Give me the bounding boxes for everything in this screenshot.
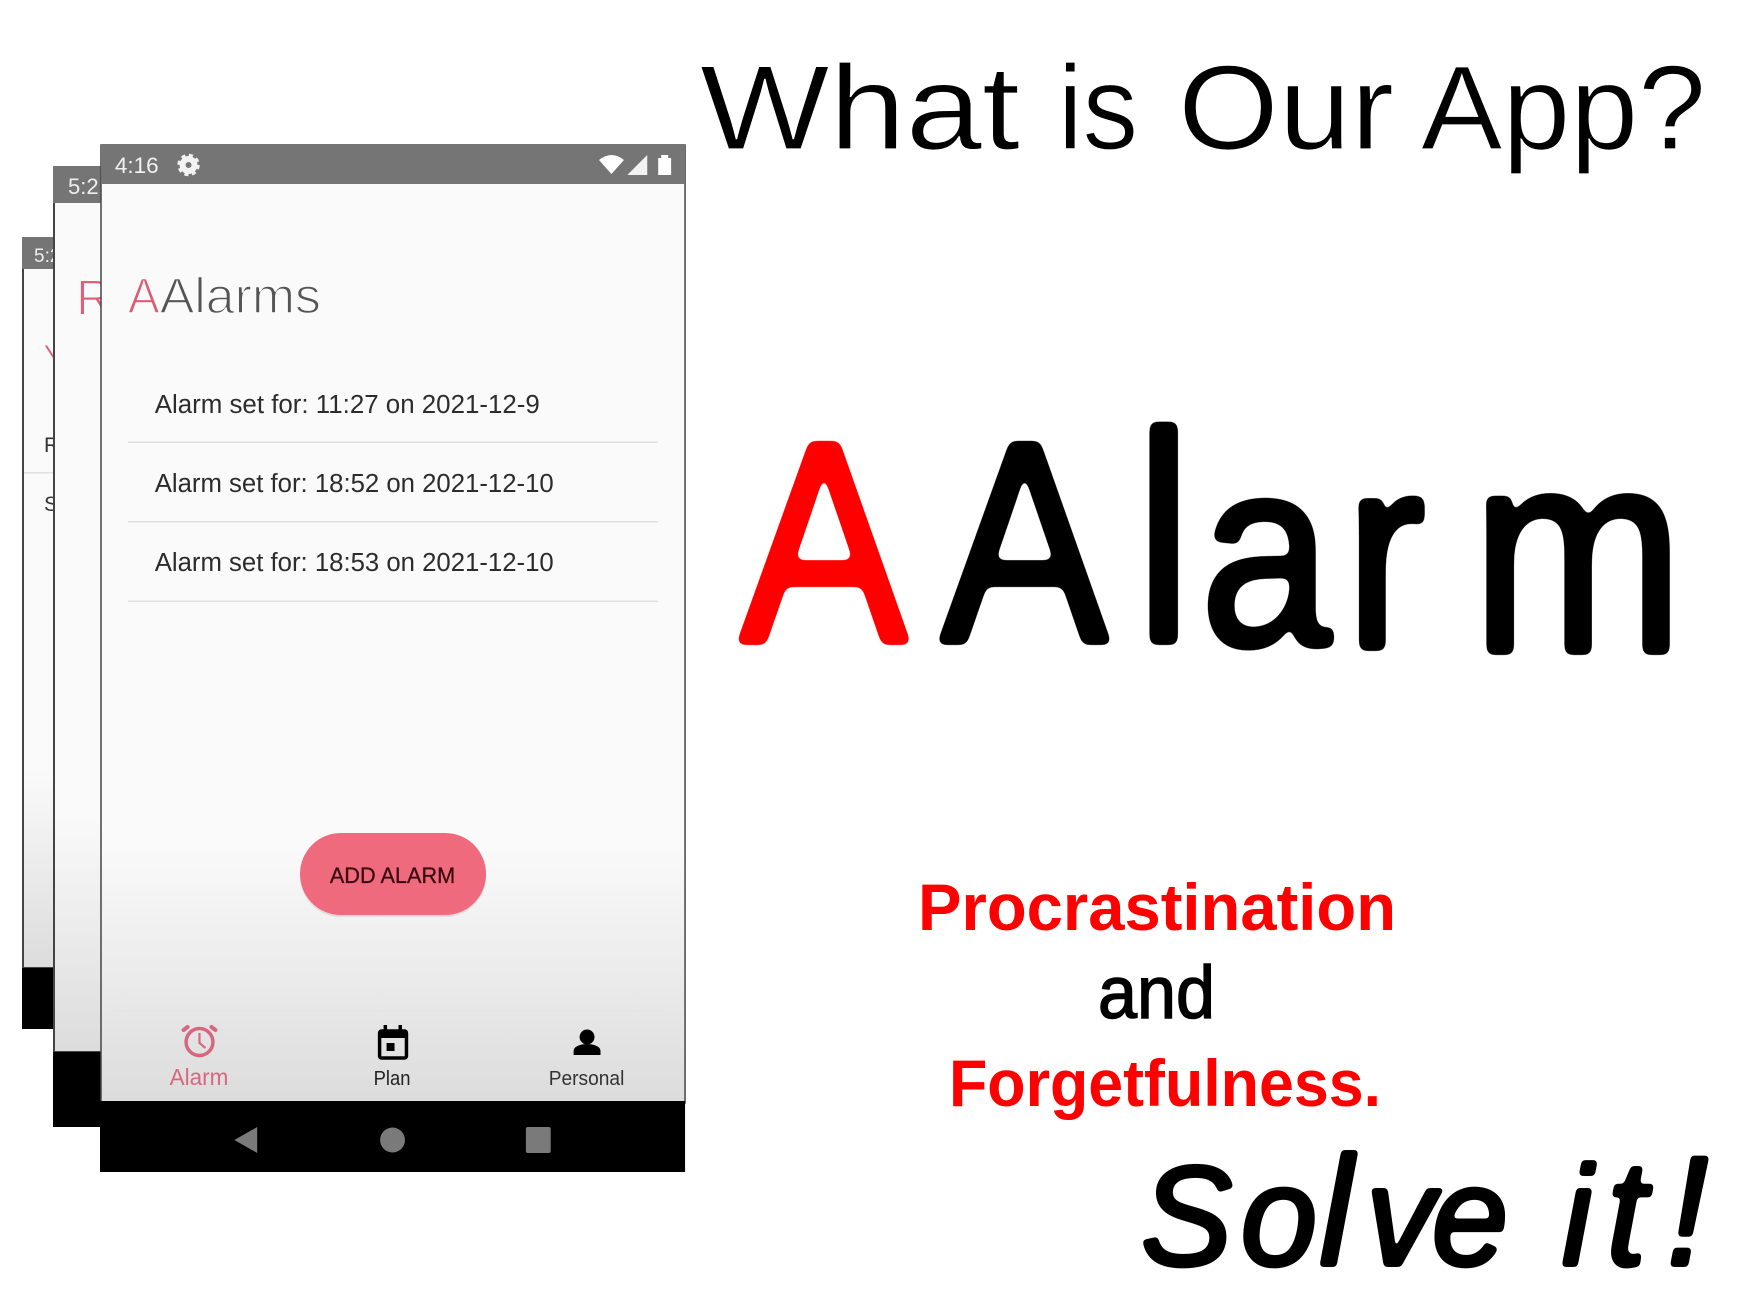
solve it slogan: t xyxy=(1606,1130,1653,1293)
app name logo: A xyxy=(940,382,1110,704)
add alarm button: ADD ALARM xyxy=(330,863,455,888)
back phone screenshot xyxy=(22,237,83,1029)
middle phone screenshot: R xyxy=(76,270,112,326)
alarm list: Alarm set for: 18:52 on 2021-12-10 xyxy=(155,470,554,498)
problem statement: Forgetfulness. xyxy=(949,1046,1381,1120)
icon: signal xyxy=(627,155,647,175)
title: is xyxy=(1058,41,1138,175)
main phone screenshot xyxy=(100,144,685,1172)
app name logo: r xyxy=(1345,397,1426,707)
status bar: 4:16 xyxy=(115,153,159,178)
solve it slogan: i xyxy=(1562,1136,1596,1293)
back phone screenshot: Y xyxy=(43,337,67,378)
problem statement xyxy=(918,870,1396,1120)
solve it slogan: S xyxy=(1141,1136,1233,1293)
back phone screenshot: S xyxy=(44,493,58,516)
problem statement: and xyxy=(1098,951,1215,1034)
nav: plan tab: Plan xyxy=(374,1068,410,1090)
title: App? xyxy=(1421,41,1706,175)
alarm list xyxy=(128,391,658,602)
title: Our xyxy=(1178,41,1394,175)
app screen background xyxy=(101,145,685,1103)
back phone screenshot: 5:2 xyxy=(34,246,60,267)
middle phone screenshot xyxy=(53,166,114,1127)
alarm list: Alarm set for: 11:27 on 2021-12-9 xyxy=(155,391,540,419)
app title: A xyxy=(128,268,160,324)
nav: personal tab: Personal xyxy=(549,1068,624,1090)
solve it slogan: o xyxy=(1241,1136,1317,1293)
title: What xyxy=(700,41,1020,175)
back phone screenshot: R xyxy=(44,434,59,457)
solve it slogan: v xyxy=(1366,1136,1442,1293)
app name logo: m xyxy=(1471,390,1684,714)
main phone screenshot: Alarms xyxy=(160,268,321,324)
app name logo: a xyxy=(1200,403,1332,702)
nav: alarm tab xyxy=(170,1027,228,1090)
nav: plan tab xyxy=(374,1025,410,1090)
alarm list: Alarm set for: 18:53 on 2021-12-10 xyxy=(155,549,554,577)
nav: alarm tab: Alarm xyxy=(170,1064,228,1090)
solve it slogan xyxy=(1141,1124,1709,1293)
icon: wifi xyxy=(599,155,624,174)
app name logo: A xyxy=(739,382,909,704)
nav: personal tab xyxy=(549,1030,624,1090)
app name logo: l xyxy=(1134,370,1193,706)
add alarm button xyxy=(300,833,486,917)
icon: battery xyxy=(658,155,671,175)
app name logo xyxy=(739,370,1684,714)
problem statement: Procrastination xyxy=(918,870,1396,944)
solve it slogan: e xyxy=(1432,1136,1508,1293)
android navigation bar xyxy=(100,1101,685,1172)
middle phone screenshot: 5:21 xyxy=(68,174,111,199)
status bar xyxy=(101,144,685,184)
icon: settings gear xyxy=(179,156,198,174)
